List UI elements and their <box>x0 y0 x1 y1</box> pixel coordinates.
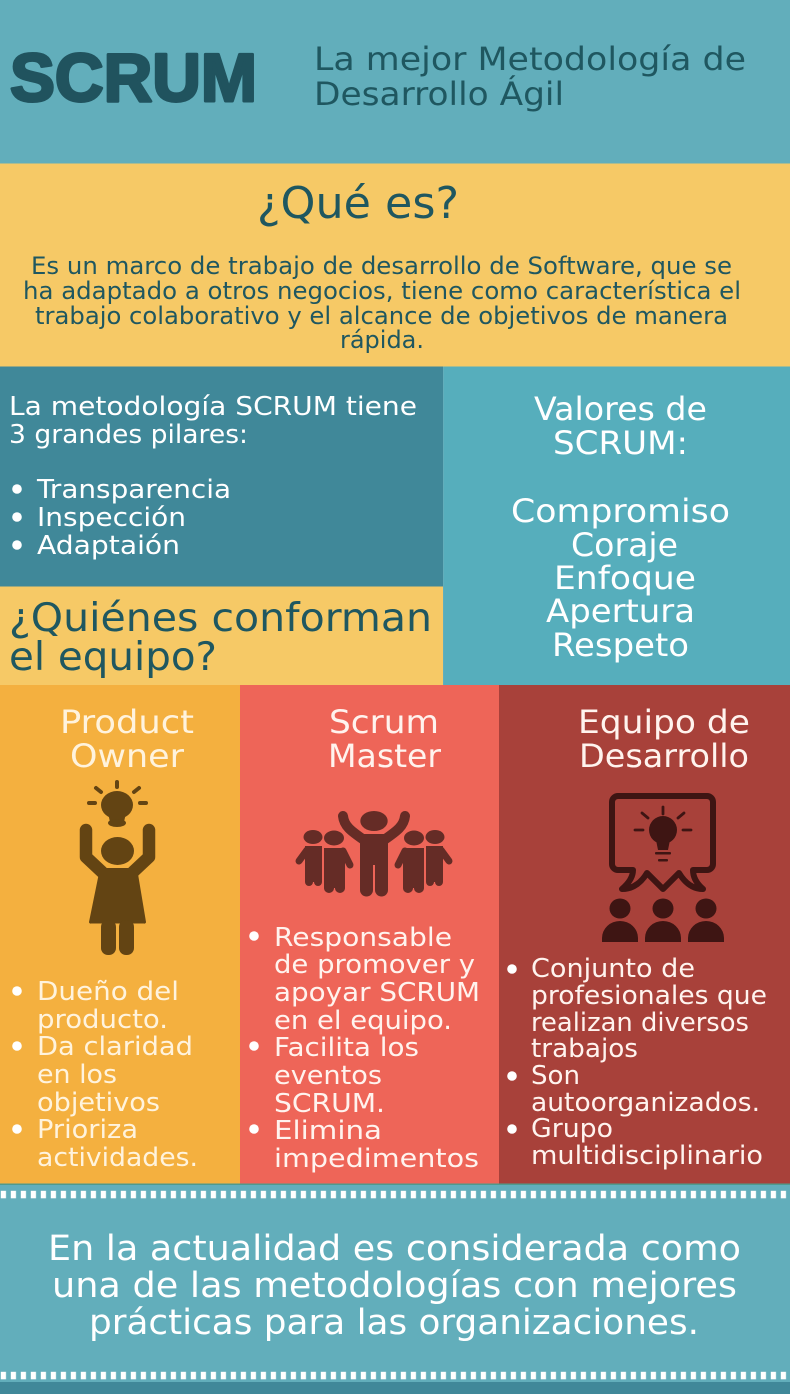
list: scrum master duties: Responsable <box>274 923 452 953</box>
list: product owner duties: Prioriza <box>37 1115 138 1145</box>
list: development team traits: profesionales que <box>531 981 767 1011</box>
list: values: Compromiso <box>511 492 730 530</box>
list: scrum master duties: eventos <box>274 1061 382 1091</box>
panel: header <box>0 0 790 164</box>
list: development team traits: realizan diversos <box>531 1008 749 1038</box>
panel: product owner <box>0 685 240 1184</box>
text block: conclusion <box>48 1229 741 1343</box>
text block: conclusion: una de las metodologías con mejores <box>52 1266 737 1306</box>
list: values: Coraje <box>571 526 678 564</box>
list: product owner duties: Dueño del <box>37 977 179 1007</box>
heading: development team <box>578 703 750 775</box>
text block: definition: Es un marco de trabajo de desarrollo de Software, que se <box>31 252 732 280</box>
list: development team traits: Conjunto de <box>531 954 695 984</box>
heading: team <box>9 596 432 680</box>
list: development team traits: Son <box>531 1061 580 1091</box>
list: product owner duties: en los <box>37 1060 117 1090</box>
list: values: Respeto <box>552 626 689 664</box>
heading: development team: Equipo de <box>578 703 750 741</box>
icon: leader with team <box>299 811 449 896</box>
list: development team traits: trabajos <box>531 1034 638 1064</box>
text block: definition <box>23 252 741 354</box>
heading: product owner: Product <box>60 703 194 741</box>
list: development team traits: multidisciplinario <box>531 1141 763 1171</box>
panel: what is it <box>0 164 790 366</box>
list: development team traits <box>507 954 767 1171</box>
subtitle <box>314 40 746 113</box>
panel: values <box>444 366 790 685</box>
heading: values: SCRUM: <box>553 424 688 462</box>
list: product owner duties: actividades. <box>37 1143 198 1173</box>
list: development team traits: Grupo <box>531 1114 613 1144</box>
heading: scrum master: Scrum <box>329 703 439 741</box>
list: product owner duties: Da claridad <box>37 1032 193 1062</box>
list: development team traits: autoorganizados. <box>531 1088 760 1118</box>
icon: person with light bulb <box>86 782 149 955</box>
title: SCRUM: SCRUM <box>10 40 257 116</box>
panel: development team <box>499 685 790 1184</box>
list: scrum master duties: impedimentos <box>274 1144 479 1174</box>
heading: values: Valores de <box>534 390 707 428</box>
heading: team: ¿Quiénes conforman <box>9 596 432 641</box>
text block: conclusion: En la actualidad es considerada como <box>48 1229 741 1269</box>
text block: pillars intro <box>9 392 417 450</box>
panel: conclusion <box>0 1185 790 1382</box>
list: product owner duties: objetivos <box>37 1088 160 1118</box>
list: scrum master duties <box>249 923 480 1174</box>
list: values <box>511 492 730 664</box>
panel: scrum master <box>240 685 499 1184</box>
subtitle: Desarrollo Ágil <box>314 75 564 113</box>
list: values: Enfoque <box>554 559 696 597</box>
heading: team: el equipo? <box>9 635 217 680</box>
text block: pillars intro: La metodología SCRUM tiene <box>9 392 417 422</box>
list: pillars: Transparencia <box>36 475 231 505</box>
list: scrum master duties: Elimina <box>274 1116 382 1146</box>
text block: definition: trabajo colaborativo y el alcance de objetivos de manera <box>35 302 728 330</box>
heading: scrum master: Master <box>328 737 442 775</box>
list: pillars: Adaptaión <box>37 531 180 561</box>
list: pillars <box>12 475 231 561</box>
list: scrum master duties: Facilita los <box>274 1033 419 1063</box>
icon: audience with idea bubble <box>602 796 724 942</box>
text block: conclusion: prácticas para las organizaciones. <box>89 1303 699 1343</box>
list: values: Apertura <box>546 592 695 630</box>
list: scrum master duties: apoyar SCRUM <box>274 978 480 1008</box>
heading: ¿Qué es?: ¿Qué es? <box>257 178 459 229</box>
text block: pillars intro: 3 grandes pilares: <box>9 420 248 450</box>
list: pillars: Inspección <box>37 503 186 533</box>
list: product owner duties: producto. <box>37 1005 168 1035</box>
panel: who forms the team <box>0 586 443 685</box>
heading: values <box>534 390 707 462</box>
list: scrum master duties: de promover y <box>274 950 475 980</box>
text block: definition: rápida. <box>340 326 424 354</box>
text block: definition: ha adaptado a otros negocios, tiene como característica el <box>23 277 741 305</box>
heading: product owner: Owner <box>70 737 185 775</box>
subtitle: La mejor Metodología de <box>314 40 746 78</box>
heading: product owner <box>60 703 194 775</box>
list: scrum master duties: SCRUM. <box>274 1089 385 1119</box>
list: product owner duties <box>12 977 198 1173</box>
heading: scrum master <box>328 703 442 775</box>
panel: pillars <box>0 366 443 586</box>
list: scrum master duties: en el equipo. <box>274 1006 452 1036</box>
heading: development team: Desarrollo <box>579 737 749 775</box>
